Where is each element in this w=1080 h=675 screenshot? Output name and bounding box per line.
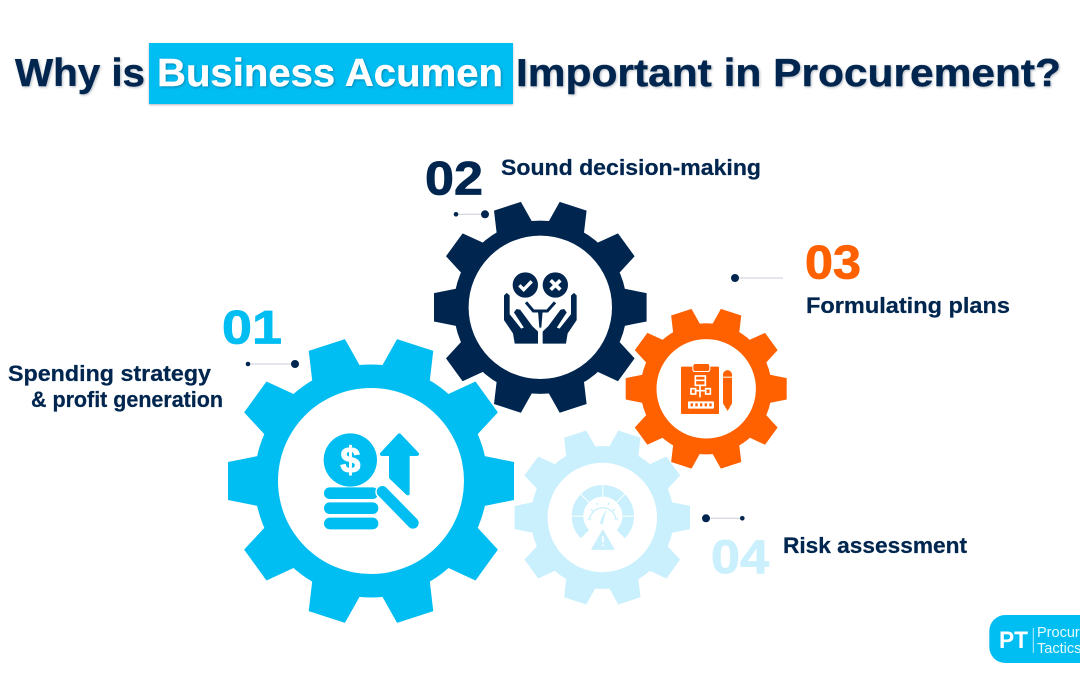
- title highlight box: [149, 43, 513, 104]
- logo initials: PT: [999, 627, 1028, 654]
- logo wordmark: Tactics: [1037, 641, 1080, 657]
- logo: [989, 615, 1080, 663]
- title text: Important in Procurement?: [516, 52, 1061, 95]
- gear 02: sound decision-making: [434, 201, 647, 414]
- number 02: 02: [425, 152, 483, 204]
- connector 04: [702, 514, 745, 522]
- item 03: [731, 236, 1010, 318]
- label 01: & profit generation: [31, 387, 223, 412]
- gear body 02: [434, 201, 647, 414]
- title highlighted words: Business Acumen: [157, 52, 503, 95]
- connector 03: [731, 274, 783, 282]
- gear 04: risk assessment: [515, 429, 690, 606]
- logo pill: [989, 615, 1080, 663]
- label 01: Spending strategy: [8, 361, 211, 386]
- number 04: 04: [711, 530, 769, 583]
- number 01: 01: [222, 300, 282, 354]
- icon: coins, arrow and magnifier: $: [340, 440, 360, 481]
- label 03: Formulating plans: [806, 293, 1010, 318]
- label 04: Risk assessment: [783, 533, 968, 558]
- icon: coins, arrow and magnifier: [324, 433, 417, 529]
- connector 02: [454, 210, 489, 218]
- icon: hands and choices: [504, 272, 576, 343]
- number 03: 03: [805, 236, 861, 288]
- gear body 04: [515, 429, 690, 606]
- gear body 01: [228, 337, 514, 625]
- title: [15, 43, 1061, 104]
- icon: risk gauge: [571, 483, 635, 551]
- connector 01: [246, 360, 299, 368]
- item 02: [425, 152, 761, 218]
- title text: Why is: [15, 52, 145, 95]
- item 04: [702, 514, 968, 583]
- item 01: [8, 300, 299, 412]
- gear 03: formulating plans: [626, 308, 787, 470]
- gear 01: spending strategy: [228, 337, 514, 625]
- label 02: Sound decision-making: [501, 155, 761, 180]
- gear body 03: [626, 308, 787, 470]
- icon: clipboard and pencil: [681, 363, 732, 414]
